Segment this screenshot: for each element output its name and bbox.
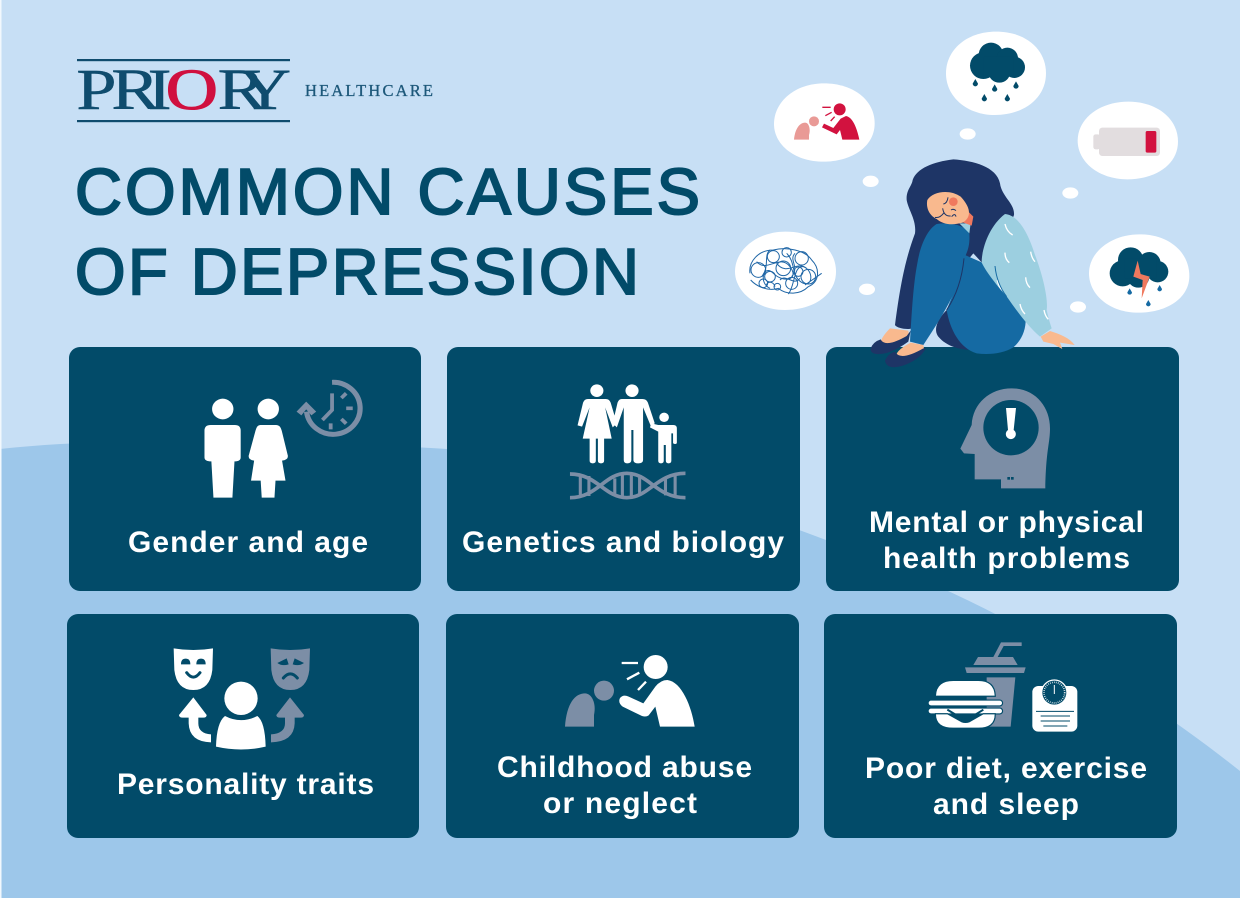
label [865,752,1147,821]
panel: mental or physical health problems [826,347,1179,591]
panel: childhood abuse or neglect [446,614,799,838]
label: Mental or physical [869,506,1144,539]
logo: Priory Healthcare: R [111,58,160,122]
panel: genetics and biology [447,347,800,591]
thought bubble: tangled scribble [735,232,836,310]
label: childhood abuse or neglect [497,751,752,820]
logo: Priory Healthcare: I [148,58,172,122]
thought bubble: shouting figures [774,83,875,162]
label: Gender and age [128,526,368,559]
icon: family and DNA [570,384,685,498]
label: health problems [883,542,1130,575]
icon: burger, drink and scale [929,642,1077,732]
panel: poor diet, exercise and sleep [824,614,1177,838]
label: and sleep [933,788,1079,821]
woman figure [871,159,1075,367]
label: Poor diet, exercise [865,752,1147,785]
logo: Priory Healthcare: P [76,58,117,122]
title: COMMON CAUSES [75,155,700,228]
logo: Priory Healthcare: Y [239,58,291,122]
logo: Priory Healthcare: R [218,58,266,122]
label: childhood abuse or neglect: Childhood abuse [497,751,752,784]
icon: person with masks [174,648,310,749]
label [869,506,1144,575]
title: OF DEPRESSION [75,235,639,308]
panel: personality traits [67,614,419,838]
small thought bubbles [859,128,1086,313]
logo: Priory Healthcare: HEALTHCARE [305,81,433,100]
logo: Priory Healthcare [76,58,433,122]
thought bubble: thunderstorm [1089,234,1189,313]
feet and hand [880,328,909,349]
thought bubble: low battery [1078,102,1178,179]
title [75,155,700,308]
thought bubble: storm cloud with rain [946,32,1046,115]
icon: adult shouting at child [565,655,695,727]
label: childhood abuse or neglect: or neglect [543,787,697,820]
label: Genetics and biology [462,526,784,559]
panel: gender and age [69,347,421,591]
illustration: woman with thought bubbles [735,32,1189,367]
label: Personality traits [117,768,374,801]
icon: head with exclamation mark [960,388,1050,488]
logo: Priory Healthcare: O [166,58,218,122]
icon: man, woman and clock [204,382,360,498]
